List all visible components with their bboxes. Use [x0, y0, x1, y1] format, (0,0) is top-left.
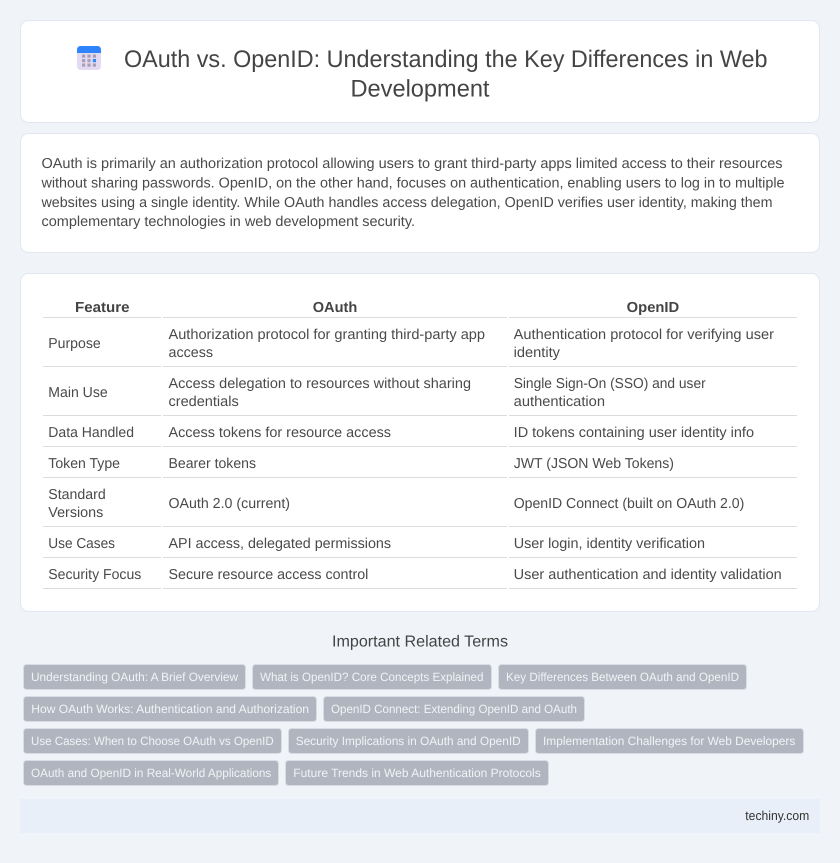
tag: What is OpenID? Core Concepts Explained — [260, 670, 484, 684]
tag — [288, 728, 528, 754]
tag: Use Cases: When to Choose OAuth vs OpenID — [31, 734, 274, 748]
row: security focus: User authentication and identity validation — [514, 567, 782, 583]
tag — [536, 728, 804, 754]
tag — [324, 696, 584, 722]
panel: intro text: OAuth is primarily an authorization protocol allowing users to grant third-party apps limited access to their resources — [42, 156, 782, 172]
row: purpose: Purpose — [48, 336, 101, 352]
table header row: Feature — [75, 300, 130, 316]
row: purpose: Authorization protocol for granting third-party app — [168, 327, 485, 343]
row: purpose: identity — [514, 345, 561, 361]
tag — [24, 728, 282, 754]
tag: How OAuth Works: Authentication and Authorization — [31, 702, 309, 716]
row: token type: Bearer tokens — [168, 456, 256, 472]
panel: header — [20, 20, 820, 122]
tag: Understanding OAuth: A Brief Overview — [31, 670, 238, 684]
panel: intro text — [20, 134, 820, 252]
row: standard versions: OAuth 2.0 (current) — [168, 496, 290, 512]
panel: intro text: without sharing passwords. OpenID, on the other hand, focuses on authentication, enabling users to log in to multiple — [41, 176, 785, 192]
heading: important related terms: Important Related Terms — [332, 634, 508, 650]
row: use cases: User login, identity verification — [514, 536, 705, 552]
row: data handled: Data Handled — [48, 425, 134, 441]
title: Development — [350, 76, 490, 102]
row: use cases — [48, 536, 705, 552]
table header row: OAuth — [313, 300, 357, 316]
row: use cases: Use Cases — [48, 536, 115, 552]
title — [124, 46, 768, 102]
footer: techiny.com — [745, 808, 809, 823]
panel: intro text: websites using a single identity. While OAuth handles access delegation, OpenID verifies user identity, making them — [41, 195, 773, 211]
tag — [24, 664, 246, 690]
footer — [20, 799, 820, 833]
tag: Future Trends in Web Authentication Protocols — [293, 766, 541, 780]
panel: comparison table — [20, 274, 820, 612]
row: security focus: Security Focus — [48, 567, 141, 583]
row: purpose: access — [168, 345, 213, 361]
tag — [24, 696, 316, 722]
title: OAuth vs. OpenID: Understanding the Key Differences in Web — [124, 46, 768, 73]
row: standard versions: Versions — [48, 505, 103, 521]
row: token type: JWT (JSON Web Tokens) — [514, 456, 674, 472]
row: purpose — [48, 327, 774, 361]
tag — [252, 664, 492, 690]
tag: Security Implications in OAuth and OpenID — [296, 734, 521, 748]
row: main use — [48, 376, 706, 410]
table header row — [75, 300, 679, 316]
related term tags — [24, 664, 804, 786]
row: standard versions — [48, 487, 744, 521]
row: security focus: Secure resource access control — [168, 567, 368, 583]
icon: calendar — [77, 46, 101, 70]
row: main use: credentials — [168, 394, 239, 410]
row: standard versions: OpenID Connect (built on OAuth 2.0) — [514, 496, 744, 512]
row: main use: Access delegation to resources without sharing — [168, 376, 471, 392]
row: use cases: API access, delegated permissions — [168, 536, 391, 552]
row: data handled: ID tokens containing user identity info — [514, 425, 754, 441]
tag: OAuth and OpenID in Real-World Applications — [31, 766, 271, 780]
row: data handled — [48, 425, 754, 441]
row: main use: Single Sign-On (SSO) and user — [514, 376, 706, 392]
table header row: OpenID — [627, 300, 679, 316]
row: security focus — [48, 567, 782, 583]
row: data handled: Access tokens for resource access — [168, 425, 391, 441]
panel: intro text: complementary technologies in web development security. — [42, 214, 415, 230]
tag: Key Differences Between OAuth and OpenID — [506, 670, 739, 684]
row: main use: authentication — [514, 394, 605, 410]
tag — [286, 760, 548, 786]
row: purpose: Authentication protocol for verifying user — [514, 327, 774, 343]
row: token type — [48, 456, 674, 472]
row: token type: Token Type — [48, 456, 120, 472]
row: main use: Main Use — [48, 385, 108, 401]
tag — [498, 664, 746, 690]
tag: Implementation Challenges for Web Developers — [543, 734, 795, 748]
tag — [24, 760, 278, 786]
tag: OpenID Connect: Extending OpenID and OAuth — [331, 702, 577, 716]
row: standard versions: Standard — [48, 487, 106, 503]
